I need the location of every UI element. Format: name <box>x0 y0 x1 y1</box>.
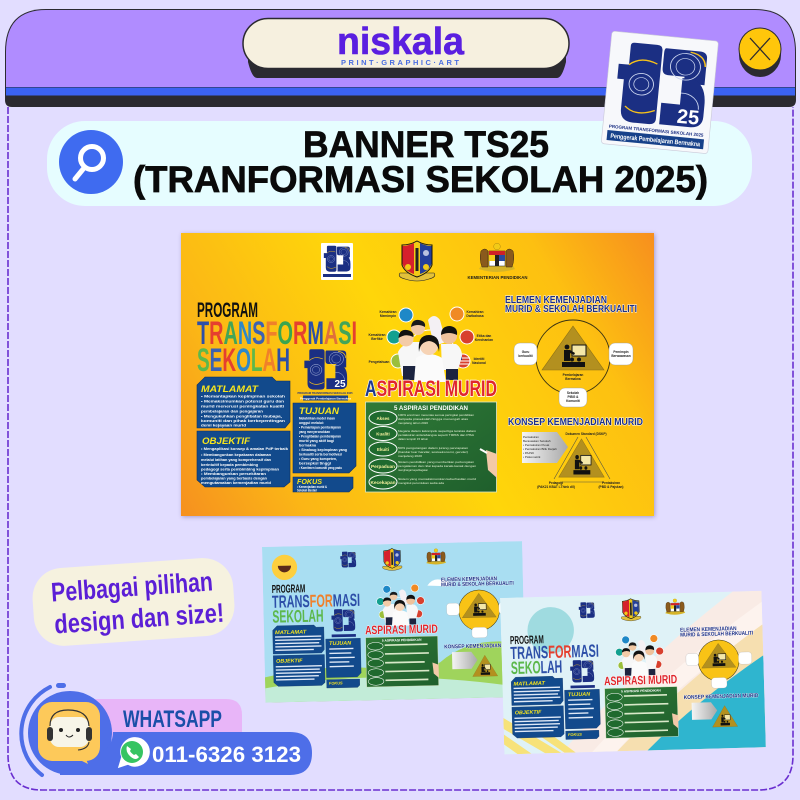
panel: Matlamat: murid menerusi peningkatan kualiti <box>201 404 284 408</box>
panel: 5 Aspirasi Pendidikan board: Perpaduan <box>371 464 395 469</box>
heading: Program Transformasi Sekolah: SEKOLAH <box>197 342 290 378</box>
panel: 5 Aspirasi Pendidikan board: Akses <box>377 416 390 421</box>
panel: Objektif: • Membangunkan persekitaran <box>201 472 266 476</box>
panel: Objektif: pembelajaran yang berbasis dengan <box>201 476 267 480</box>
panel: 5 Aspirasi Pendidikan board: mengikut peruntukan sedia ada <box>398 481 444 485</box>
panel: Matlamat: pembelajaran dan pengajaran <box>201 410 263 414</box>
panel: 5 Aspirasi Pendidikan board: Ekuiti <box>377 447 389 452</box>
panel: pastel banner variant: ASPIRASI MURID <box>604 672 677 688</box>
panel: Matlamat: MATLAMAT <box>201 384 259 395</box>
panel: Tujuan: Melahirkan model insan <box>299 416 335 420</box>
panel: Matlamat: • Memaksimumkan potensi guru dan <box>201 400 284 404</box>
panel: Fokus: FOKUS <box>297 479 322 486</box>
logo: school crest <box>399 241 435 281</box>
diagram: Elemen Kemenjadian cycle <box>514 320 633 407</box>
panel: Matlamat: demi kejayaan murid <box>201 424 246 428</box>
panel: pastel banner variant: MURID & SEKOLAH BERKUALITI <box>680 631 754 639</box>
panel: 5 Aspirasi Pendidikan board: (bandar luar bandar, sosioekonomi, gender) <box>398 450 468 454</box>
illustration: students with icons: Memimpin <box>380 314 396 318</box>
panel: Objektif: berintuitif kepada pembimbing <box>201 463 258 467</box>
panel: 5 Aspirasi Pendidikan board: Sistem pendidikan yang memberikan perkongsian <box>398 460 474 464</box>
panel: pastel banner variant: TRANSFORMASI <box>510 641 599 663</box>
diagram: Elemen Kemenjadian cycle: Berwawasan <box>611 354 631 358</box>
panel: 5 Aspirasi Pendidikan board: menjelang 2020 <box>398 454 422 458</box>
panel: pastel banner variant: ELEMEN KEMENJADIAN <box>680 626 737 634</box>
logo: TS25 large: PROGRAM TRANSFORMASI SEKOLAH 2025 <box>297 391 353 395</box>
panel: 5 Aspirasi Pendidikan board <box>366 402 497 492</box>
panel: 5 Aspirasi Pendidikan board: 50% pengurangan dalam jurang pencapaian <box>398 446 468 450</box>
panel: blue banner variant: FOKUS <box>329 681 343 686</box>
diagram: Elemen Kemenjadian cycle: Guru <box>522 350 529 354</box>
illustration: students with icons: Pengetahuan <box>369 360 389 364</box>
sticker: TS25 logo: PROGRAM TRANSFORMASI SEKOLAH 2025 <box>609 124 704 138</box>
illustration: students with icons: Kerohanian <box>475 338 493 342</box>
illustration: students with icons: Berfikir <box>371 337 383 341</box>
diagram: Konsep Kemenjadian triangle: Berasaskan Sekolah <box>523 439 551 443</box>
panel: blue banner variant: ELEMEN KEMENJADIAN <box>441 576 497 583</box>
panel: Objektif: • Mengaplikasi konsep & amalan PdP terbaik <box>201 447 288 451</box>
panel: Objektif: pedagogi serta pembimbing kepimpinan <box>201 468 279 472</box>
panel: Tujuan: • Pemantapan pembelajaran <box>299 426 341 430</box>
panel: pastel banner variant: PROGRAM <box>510 633 544 647</box>
title: (TRANFORMASI SEKOLAH 2025) <box>133 159 708 200</box>
diagram: Konsep Kemenjadian triangle: Dokumen Standard (DSKP) <box>565 432 607 436</box>
panel: Tujuan: yang menyeronokkan <box>299 430 330 434</box>
panel: pastel banner variant: MATLAMAT <box>513 681 546 688</box>
diagram: Konsep Kemenjadian triangle: (PAK21 KBAT i-Think dll) <box>537 485 575 489</box>
diagram: Elemen Kemenjadian cycle: berkualiti <box>518 354 533 358</box>
panel: 5 Aspirasi Pendidikan board: Sistem yang memaksimumkan keberhasilan murid <box>398 477 476 481</box>
logo: TS25 large: 25 <box>334 379 346 390</box>
diagram: Konsep Kemenjadian triangle: Pedagogi <box>549 481 563 485</box>
panel: 5 Aspirasi Pendidikan board: 100% enrolmen merentas semua peringkat pendidikan <box>398 413 474 417</box>
heading: Program Transformasi Sekolah <box>197 299 357 378</box>
panel: Tujuan: berkualiti serta bermotivasi <box>299 452 342 456</box>
heading: Konsep Kemenjadian Murid: KONSEP KEMENJADIAN MURID <box>508 417 643 428</box>
diagram: Konsep Kemenjadian triangle: • Psikometrik <box>523 455 541 459</box>
diagram: Konsep Kemenjadian triangle <box>522 432 623 489</box>
window header bar <box>5 9 796 107</box>
diagram: Konsep Kemenjadian triangle: • PAJSK <box>523 451 534 455</box>
panel: Tujuan: • Sinaloug kepimpinan yang <box>299 448 347 452</box>
illustration: students with icons: Kemahiran <box>379 310 397 314</box>
panel: 5 Aspirasi Pendidikan board: pengalaman dan nilai kepada kanak-kanak dengan <box>398 464 476 468</box>
mascot backdrop <box>21 683 113 775</box>
panel: blue banner variant: TUJUAN <box>329 641 351 647</box>
panel: Fokus <box>293 477 353 492</box>
brand pill: niskala: PRINT·GRAPHIC·ART <box>341 58 459 67</box>
heading: Program Transformasi Sekolah: TRANSFORMASI <box>197 315 357 351</box>
panel: 5 Aspirasi Pendidikan board: menjelang tahun 2020 <box>398 421 428 425</box>
panel: blue banner variant: OBJEKTIF <box>276 658 303 665</box>
icon: robot mascot <box>38 702 100 764</box>
phone number pill <box>60 732 312 775</box>
panel: blue banner variant: MURID & SEKOLAH BERKUALITI <box>441 581 514 588</box>
panel: Objektif: melalui latihan yang komprehensif dan <box>201 458 271 462</box>
panel: pastel banner variant <box>500 591 766 754</box>
brand pill: niskala <box>243 18 569 78</box>
diagram: Elemen Kemenjadian cycle: Pembelajaran <box>563 373 583 377</box>
close button <box>739 28 781 77</box>
WhatsApp contact badge <box>21 683 312 775</box>
panel: 5 Aspirasi Pendidikan board: menghargai kepelbagaian <box>398 468 428 472</box>
illustration: students with icons: Identiti <box>474 357 484 361</box>
panel: Tujuan: bermakna <box>299 444 316 448</box>
panel: Matlamat <box>197 377 290 428</box>
icon: search <box>59 130 123 194</box>
heading: Aspirasi Murid: ASPIRASI MURID <box>365 376 497 401</box>
illustration: students with icons <box>368 307 493 382</box>
logo: TS25 large: Penggerak Pembelajaran Bermakna <box>300 396 351 400</box>
panel: Tujuan: TUJUAN <box>299 406 340 417</box>
sticker: TS25 logo: 25 <box>676 106 700 130</box>
diagram: Konsep Kemenjadian triangle: • Pentaksiran Bilik Darjah <box>523 447 557 451</box>
panel: Objektif <box>197 431 290 487</box>
panel: Objektif: • Membangunkan kepakaran dalaman <box>201 453 271 457</box>
sticker: TS25 logo: Penggerak Pembelajaran Bermakna <box>610 133 701 148</box>
panel: blue banner variant: PROGRAM <box>272 583 305 596</box>
panel: Fokus: • Kemenjadian murid & <box>297 485 328 489</box>
panel: Tujuan: • Penglibatan pembelajaran <box>299 434 341 438</box>
panel: Tujuan: bersepksi tinggi <box>299 462 331 466</box>
diagram: Konsep Kemenjadian triangle: Pentaksiran <box>602 481 620 485</box>
heading: Elemen Kemenjadian <box>505 295 637 315</box>
diagram: Konsep Kemenjadian triangle: Pentaksiran <box>523 435 539 439</box>
illustration: students with icons: Etika dan <box>477 334 491 338</box>
panel: Tujuan: unggul melalui: <box>299 421 324 425</box>
panel: blue banner variant: 5 ASPIRASI PENDIDIKAN <box>382 638 422 643</box>
panel: Matlamat: • Mengukuhkan penglibatan ibubapa, <box>201 414 282 418</box>
callout: Pelbagai pilihan: design dan size! <box>53 598 225 640</box>
callout: Pelbagai pilihan: Pelbagai pilihan <box>50 566 214 608</box>
diagram: Elemen Kemenjadian cycle: PIBG & <box>568 395 579 399</box>
phone number pill: 011-6326 3123 <box>152 742 301 767</box>
diagram: Elemen Kemenjadian cycle: Sekolah <box>567 391 579 395</box>
panel: blue banner variant: MATLAMAT <box>275 629 307 636</box>
panel: pastel banner variant: TUJUAN <box>568 692 590 698</box>
panel: Fokus: Sekolah Bestari <box>297 488 317 492</box>
heading: Program Transformasi Sekolah: PROGRAM <box>197 299 258 322</box>
panel: 5 Aspirasi Pendidikan board: dalam tempoh 15 tahun <box>398 437 428 441</box>
diagram: Elemen Kemenjadian cycle: Bermakna <box>565 377 581 381</box>
callout: Pelbagai pilihan <box>31 556 236 648</box>
logo: Malaysian coat of arms <box>468 243 528 280</box>
illustration: students with icons: Kemahiran <box>368 333 386 337</box>
panel: 5 Aspirasi Pendidikan board: 5 ASPIRASI PENDIDIKAN <box>394 406 468 412</box>
panel: blue banner variant: SEKOLAH <box>272 606 324 627</box>
title bar <box>47 121 752 206</box>
panel: pastel banner variant: 5 ASPIRASI PENDIDIKAN <box>621 688 661 694</box>
title: BANNER TS25 <box>303 124 549 165</box>
panel: Tujuan: murid yang aktif bagi <box>299 439 334 443</box>
icon: WhatsApp <box>119 738 149 767</box>
panel: 5 Aspirasi Pendidikan board: Negara dalam kelompok sepertiga teratas dalam <box>398 429 477 433</box>
panel: blue banner variant: ASPIRASI MURID <box>365 622 438 637</box>
title <box>133 124 708 200</box>
main banner background <box>181 233 654 516</box>
illustration: students with icons: Dwibahasa <box>466 314 484 318</box>
panel: Objektif: OBJEKTIF <box>202 436 250 447</box>
diagram: Elemen Kemenjadian cycle: Pemimpin <box>613 350 629 354</box>
WhatsApp label tab <box>92 699 242 735</box>
panel: Tujuan: • Komitmen komuniti yang padu <box>299 466 342 470</box>
panel: main banner <box>181 233 654 516</box>
panel: 5 Aspirasi Pendidikan board: pentaksiran antarabangsa seperti TIMSS dan PISA <box>398 433 474 437</box>
panel: Tujuan: • Guru yang kompeten, <box>299 457 337 461</box>
panel: blue banner variant: KONSEP KEMENJADIAN MURID <box>444 643 518 650</box>
brand pill: niskala: niskala <box>337 21 465 63</box>
panel: Matlamat: • Memantapkan kepimpinan sekolah <box>201 394 285 398</box>
panel: Objektif: mengutamakan kemenjadian murid <box>201 481 271 485</box>
panel: blue banner variant: TRANSFORMASI <box>272 590 360 612</box>
WhatsApp label tab: WHATSAPP <box>123 706 222 733</box>
panel: 5 Aspirasi Pendidikan board: Kecekapan <box>370 480 396 485</box>
panel: Tujuan <box>293 403 356 473</box>
illustration: students with icons: Nasional <box>472 361 486 365</box>
diagram: Konsep Kemenjadian triangle: • Pentaksiran Pusat <box>523 443 549 447</box>
illustration: students with icons: Kemahiran <box>466 310 484 314</box>
heading: Elemen Kemenjadian: MURID & SEKOLAH BERKUALITI <box>505 304 637 315</box>
sticker: TS25 logo <box>601 31 719 154</box>
heading: Elemen Kemenjadian: ELEMEN KEMENJADIAN <box>505 295 607 306</box>
logo: TS25 large <box>297 349 353 400</box>
panel: blue banner variant <box>262 541 526 703</box>
diagram: Elemen Kemenjadian cycle: Komuniti <box>566 399 580 403</box>
panel: 5 Aspirasi Pendidikan board: Kualiti <box>376 432 390 436</box>
panel: pastel banner variant: KONSEP KEMENJADIAN MURID <box>684 693 758 701</box>
logo: Malaysian coat of arms: KEMENTERIAN PENDIDIKAN <box>468 275 528 280</box>
logo: TS25 small <box>321 243 353 280</box>
panel: Matlamat: komuniti dan pihak berkepentingan <box>201 419 285 423</box>
panel: 5 Aspirasi Pendidikan board: daripada prasekolah hingga menengah atas <box>398 417 469 421</box>
panel: pastel banner variant: SEKOLAH <box>511 657 562 678</box>
diagram: Konsep Kemenjadian triangle: (PBD & Pajskan) <box>599 485 623 489</box>
panel: pastel banner variant: FOKUS <box>568 732 582 737</box>
panel: pastel banner variant: OBJEKTIF <box>515 710 542 716</box>
